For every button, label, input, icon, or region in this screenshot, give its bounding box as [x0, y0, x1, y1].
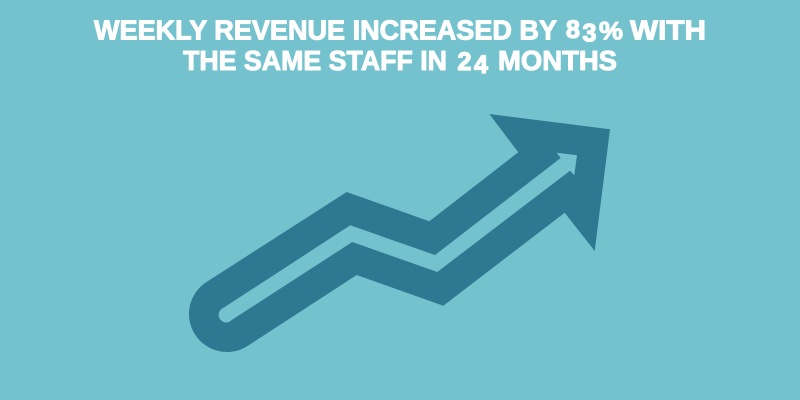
title: THE SAME STAFF IN: [183, 45, 447, 76]
title: 4: [474, 51, 488, 79]
title: WEEKLY REVENUE INCREASED BY: [94, 14, 557, 46]
title: 3: [582, 20, 596, 48]
title: WITH: [630, 14, 706, 46]
title: %: [599, 18, 623, 46]
icon: rising zigzag arrow: [189, 114, 610, 352]
title: MONTHS: [498, 45, 617, 76]
title: 8: [566, 16, 580, 44]
title: 2: [458, 48, 471, 76]
title: [94, 14, 706, 79]
